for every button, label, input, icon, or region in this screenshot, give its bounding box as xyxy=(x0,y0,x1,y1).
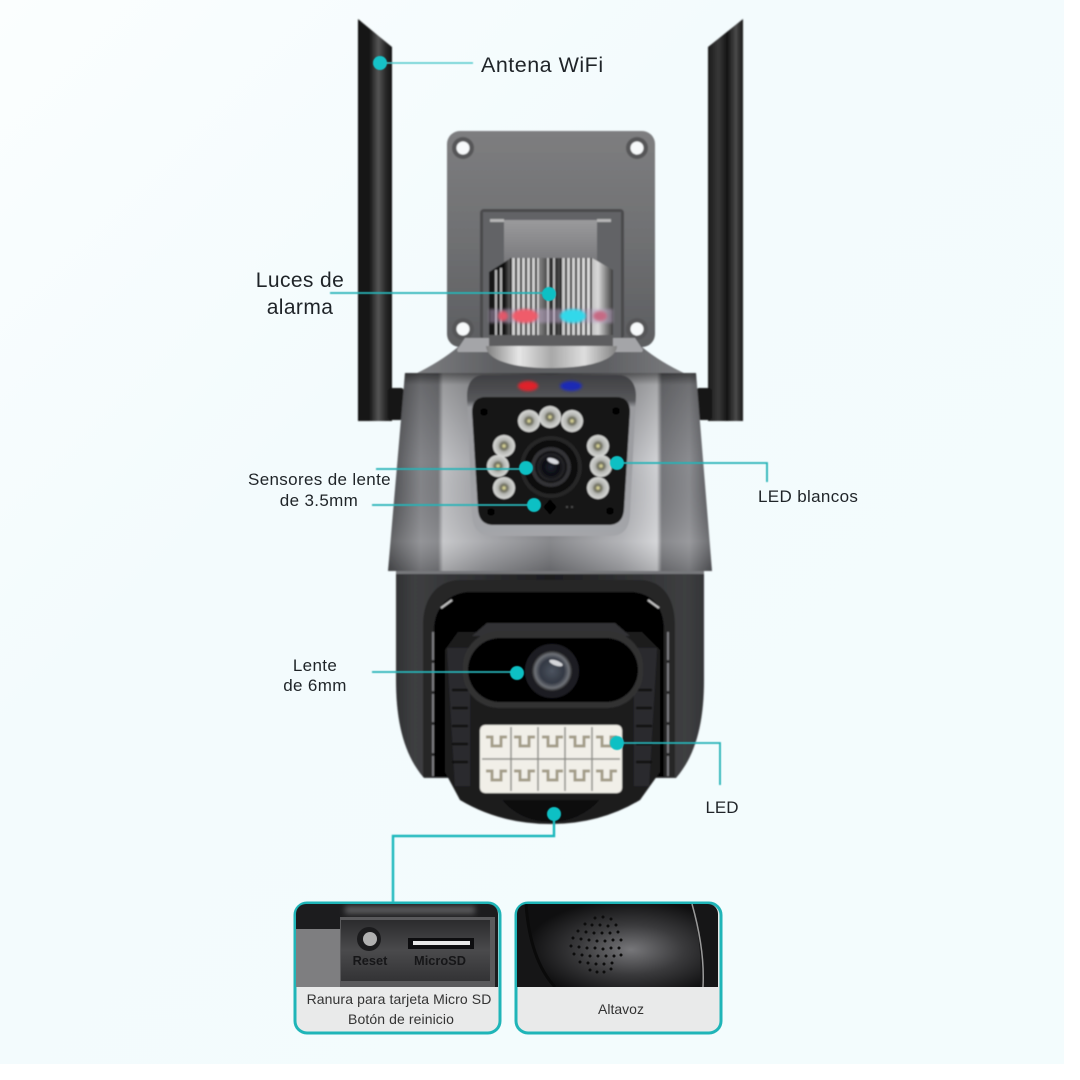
seam between housings xyxy=(396,571,704,574)
label: Luces de alarma: alarma xyxy=(267,296,333,319)
caption: card slot and reset: Ranura para tarjeta Micro SD xyxy=(307,991,491,1007)
panel: speaker xyxy=(516,903,721,1033)
white LED panel xyxy=(480,725,622,793)
label: Antena WiFi: Antena WiFi xyxy=(481,53,604,77)
leader line: de 3.5mm xyxy=(372,498,541,512)
top lens module xyxy=(467,375,636,536)
silver collar ring xyxy=(486,346,617,368)
caption: card slot and reset: Botón de reinicio xyxy=(348,1011,454,1027)
leader line: Antena WiFi xyxy=(373,56,473,70)
camera product photo xyxy=(358,19,743,824)
photo: speaker grille xyxy=(517,904,718,987)
label: Lente de 6mm: de 6mm xyxy=(283,676,347,695)
leader line: Micro SD card xyxy=(393,807,561,902)
leader line: sensores de lente xyxy=(376,461,533,475)
leader line: LED xyxy=(610,736,720,785)
leader line: Lente de 6mm xyxy=(372,666,524,680)
card background xyxy=(516,903,721,1033)
shoulder of the housing xyxy=(415,338,686,374)
label: Luces de alarma: Luces de xyxy=(256,269,344,292)
photo: slot cover: MicroSD xyxy=(414,953,466,968)
bottom camera head xyxy=(445,623,660,824)
photo: slot cover: Reset xyxy=(353,953,388,968)
caption: Altavoz: Altavoz xyxy=(598,1001,644,1017)
label: Sensores de lente de 3.5mm: de 3.5mm xyxy=(280,491,358,510)
label: Lente de 6mm: Lente xyxy=(293,656,337,675)
lower rotating housing xyxy=(396,570,704,778)
leader line: LED blancos xyxy=(610,456,767,482)
alarm light cylinder xyxy=(489,258,613,346)
housing vertical shading xyxy=(388,373,712,571)
label: Sensores de lente de 3.5mm: Sensores de lente xyxy=(248,470,391,489)
mounting plate xyxy=(447,131,655,347)
photo: slot cover xyxy=(296,904,498,987)
label: LED: LED xyxy=(705,798,739,817)
upper housing xyxy=(388,373,712,571)
red and blue glow xyxy=(518,381,582,391)
label: LED blancos: LED blancos xyxy=(758,487,858,506)
icon: left WiFi antenna xyxy=(358,19,404,421)
card background xyxy=(295,903,500,1033)
leader line: Luces de alarma xyxy=(330,287,556,301)
icon: right WiFi antenna xyxy=(696,19,743,421)
panel: Micro SD and reset xyxy=(295,903,500,1033)
